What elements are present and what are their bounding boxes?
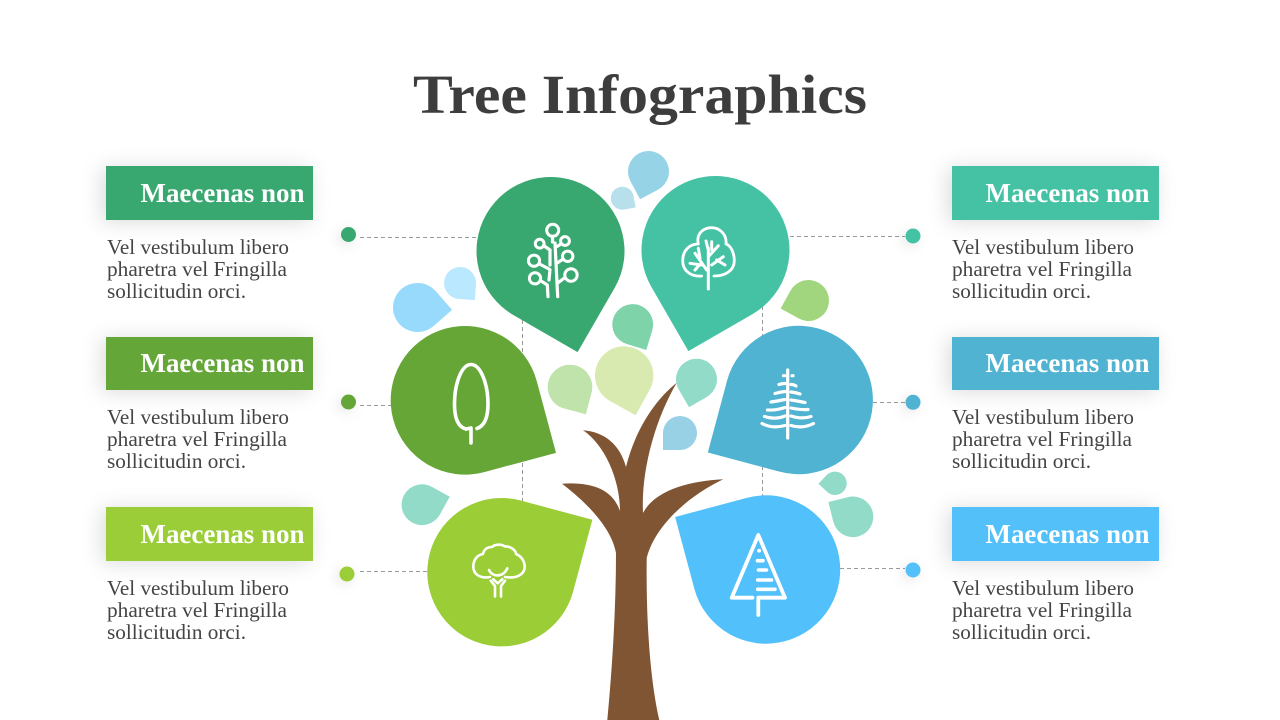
icon: round tree	[683, 228, 734, 289]
panel: right 3: Maecenas non	[986, 519, 1150, 549]
dot: blue	[906, 395, 920, 410]
panel: right 1: Maecenas non	[986, 178, 1150, 208]
icon: fir tree	[762, 370, 814, 438]
icon: triangle pine	[732, 535, 785, 615]
panel: left 3	[106, 507, 313, 644]
panel: right 3	[952, 507, 1159, 644]
icon: oak tree	[473, 545, 525, 596]
panel: left 1: Vel vestibulum libero	[107, 235, 289, 259]
leaf: green	[374, 309, 556, 491]
panel: right 2: Maecenas non	[986, 348, 1150, 378]
leaf: lime	[411, 481, 592, 663]
panel: right 1: sollicitudin orci.	[952, 279, 1091, 303]
dot: teal	[906, 228, 920, 244]
panel: left 3: sollicitudin orci.	[107, 620, 246, 644]
panel: right 3: Vel vestibulum libero	[952, 576, 1134, 600]
dot: sky blue	[906, 562, 920, 578]
dot: dark green	[341, 227, 356, 242]
panel: right 2: Vel vestibulum libero	[952, 405, 1134, 429]
panel: left 2: pharetra vel Fringilla	[107, 427, 288, 451]
panel: right 1	[952, 166, 1159, 303]
panel: right 1: pharetra vel Fringilla	[952, 257, 1133, 281]
panel: left 3: pharetra vel Fringilla	[107, 598, 288, 622]
panel: right 2: pharetra vel Fringilla	[952, 427, 1133, 451]
panel: left 1: Maecenas non	[140, 178, 304, 208]
panel: left 1	[106, 166, 313, 303]
panel: right 2: sollicitudin orci.	[952, 449, 1091, 473]
icon: poplar leaf	[454, 364, 488, 443]
leaf: blue	[708, 309, 890, 491]
dot: lime	[340, 566, 354, 582]
panel: right 1: Vel vestibulum libero	[952, 235, 1134, 259]
small decorative leaves	[383, 144, 878, 541]
panel: left 2: Maecenas non	[140, 348, 304, 378]
panel: left 1: sollicitudin orci.	[107, 279, 246, 303]
panel: left 2: Vel vestibulum libero	[107, 405, 289, 429]
panel: left 3: Maecenas non	[140, 519, 304, 549]
panel: right 3: sollicitudin orci.	[952, 620, 1091, 644]
panel: right 3: pharetra vel Fringilla	[952, 598, 1133, 622]
connector lines	[360, 236, 905, 572]
panel: left 2: sollicitudin orci.	[107, 449, 246, 473]
dot: green	[341, 394, 356, 410]
icon: branching tree	[528, 224, 577, 297]
leaf: teal	[614, 149, 817, 351]
panel: left 1: pharetra vel Fringilla	[107, 257, 288, 281]
panel: left 3: Vel vestibulum libero	[107, 576, 289, 600]
tree trunk	[562, 383, 723, 720]
panel: left 2	[106, 337, 313, 473]
leaf: dark green	[449, 150, 652, 352]
leaf: sky blue	[675, 479, 857, 660]
panel: right 2	[952, 337, 1159, 473]
title: Tree Infographics	[413, 64, 867, 125]
